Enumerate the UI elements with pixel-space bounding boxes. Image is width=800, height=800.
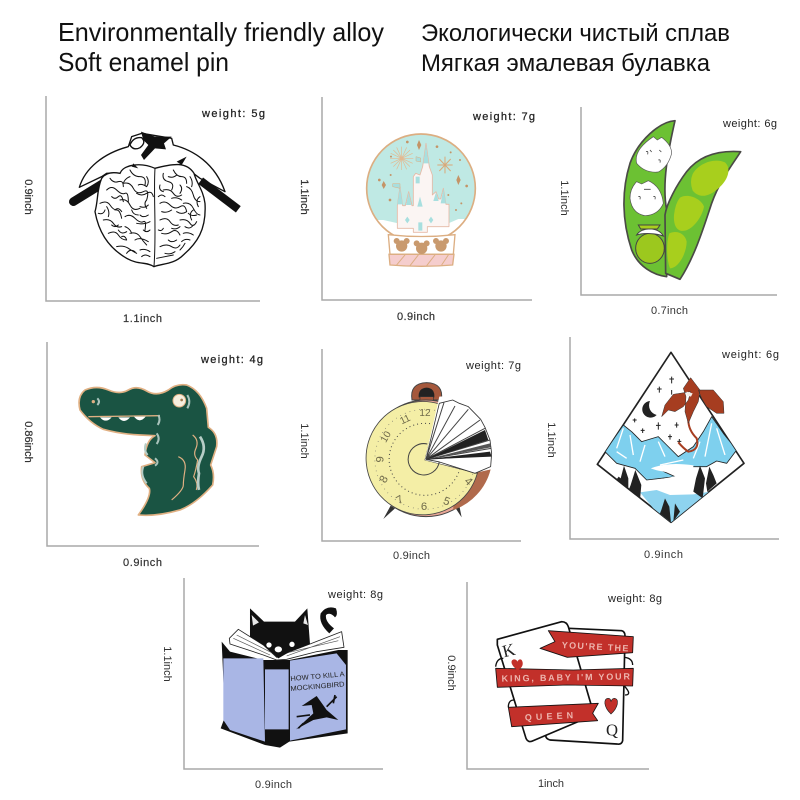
- icon: brain with needles: [73, 132, 238, 267]
- icon: clock with pages: 4: [462, 475, 475, 488]
- panel: mountain diamond pin: [545, 337, 779, 561]
- panel: edamame pin: [558, 107, 777, 317]
- width label: 0.9inch: [393, 550, 430, 562]
- width label: 0.9inch: [255, 779, 292, 791]
- axes: [570, 337, 779, 539]
- ribbon text: YOU'RE THE: [562, 640, 629, 653]
- height label: 1.1inch: [545, 422, 557, 458]
- icon: snow globe with castle: [365, 134, 478, 266]
- width label: 1inch: [538, 778, 564, 790]
- weight label: weight: 6g: [721, 349, 779, 361]
- icon: dragon and mountains diamond: [597, 352, 744, 525]
- width label: 0.9inch: [644, 549, 683, 561]
- ribbon text: QUEEN: [525, 710, 573, 723]
- ribbon text: KING, BABY I'M YOUR: [502, 671, 630, 684]
- weight label: weight: 8g: [327, 589, 383, 601]
- axes: [184, 578, 383, 769]
- axes: [322, 97, 532, 300]
- book title: HOW TO KILL A: [290, 671, 345, 683]
- panel: clock pin: [298, 349, 521, 562]
- height label: 0.9inch: [22, 179, 34, 215]
- axes: [322, 349, 521, 541]
- title: English: Environmentally friendly alloy: [58, 17, 384, 47]
- axes: [581, 107, 777, 295]
- icon: king and queen cards with ribbons: K: [500, 640, 518, 661]
- icon: clock with pages: [366, 383, 495, 519]
- icon: clock with pages: 8: [378, 474, 391, 485]
- weight label: weight: 7g: [465, 360, 521, 372]
- icon: clock with pages: 6: [421, 501, 427, 513]
- icon: king and queen cards with ribbons: Q: [606, 721, 618, 740]
- icon: cat reading a book: [221, 607, 348, 748]
- title: Russian: Мягкая эмалевая булавка: [421, 50, 711, 77]
- icon: clock with pages: 10: [379, 429, 394, 445]
- book title: MOCKINGBIRD: [290, 681, 345, 693]
- icon: clock with pages: 9: [374, 456, 386, 462]
- book title: [290, 671, 345, 693]
- height label: 1.1inch: [161, 646, 173, 682]
- icon: edamame pods: [624, 121, 741, 279]
- panel: cat with book pin: [161, 578, 383, 791]
- weight label: weight: 4g: [200, 354, 263, 366]
- axes: [47, 342, 259, 546]
- icon: clock with pages: 5: [442, 495, 452, 509]
- height label: 0.86inch: [22, 421, 34, 463]
- height label: 1.1inch: [298, 423, 310, 459]
- width label: 0.9inch: [123, 557, 162, 569]
- panel: crocodile pin: [22, 342, 263, 569]
- axes: [46, 96, 260, 301]
- height label: 0.9inch: [445, 655, 457, 691]
- weight label: weight: 8g: [607, 593, 662, 605]
- weight label: weight: 5g: [201, 108, 265, 120]
- height label: 1.1inch: [558, 180, 570, 216]
- width label: 0.9inch: [397, 311, 435, 323]
- weight label: weight: 7g: [472, 111, 535, 123]
- icon: clock with pages: 7: [394, 493, 406, 507]
- title: Russian: [421, 20, 730, 77]
- title: English: Soft enamel pin: [58, 47, 229, 77]
- weight label: weight: 6g: [722, 118, 777, 130]
- icon: clock with pages: 11: [398, 413, 413, 427]
- width label: 0.7inch: [651, 305, 688, 317]
- ribbon text: [502, 640, 630, 723]
- panel: playing cards pin: [445, 582, 662, 790]
- icon: crocodile: [79, 385, 217, 515]
- panel: snow globe pin: [298, 97, 535, 323]
- icon: clock with pages: 12: [419, 408, 431, 419]
- title: English: [58, 17, 384, 77]
- height label: 1.1inch: [298, 179, 310, 215]
- title: Russian: Экологически чистый сплав: [421, 20, 730, 47]
- width label: 1.1inch: [123, 313, 162, 325]
- icon: king and queen cards with ribbons: [496, 622, 633, 744]
- panel: knitted brain pin: [22, 96, 265, 325]
- axes: [467, 582, 649, 769]
